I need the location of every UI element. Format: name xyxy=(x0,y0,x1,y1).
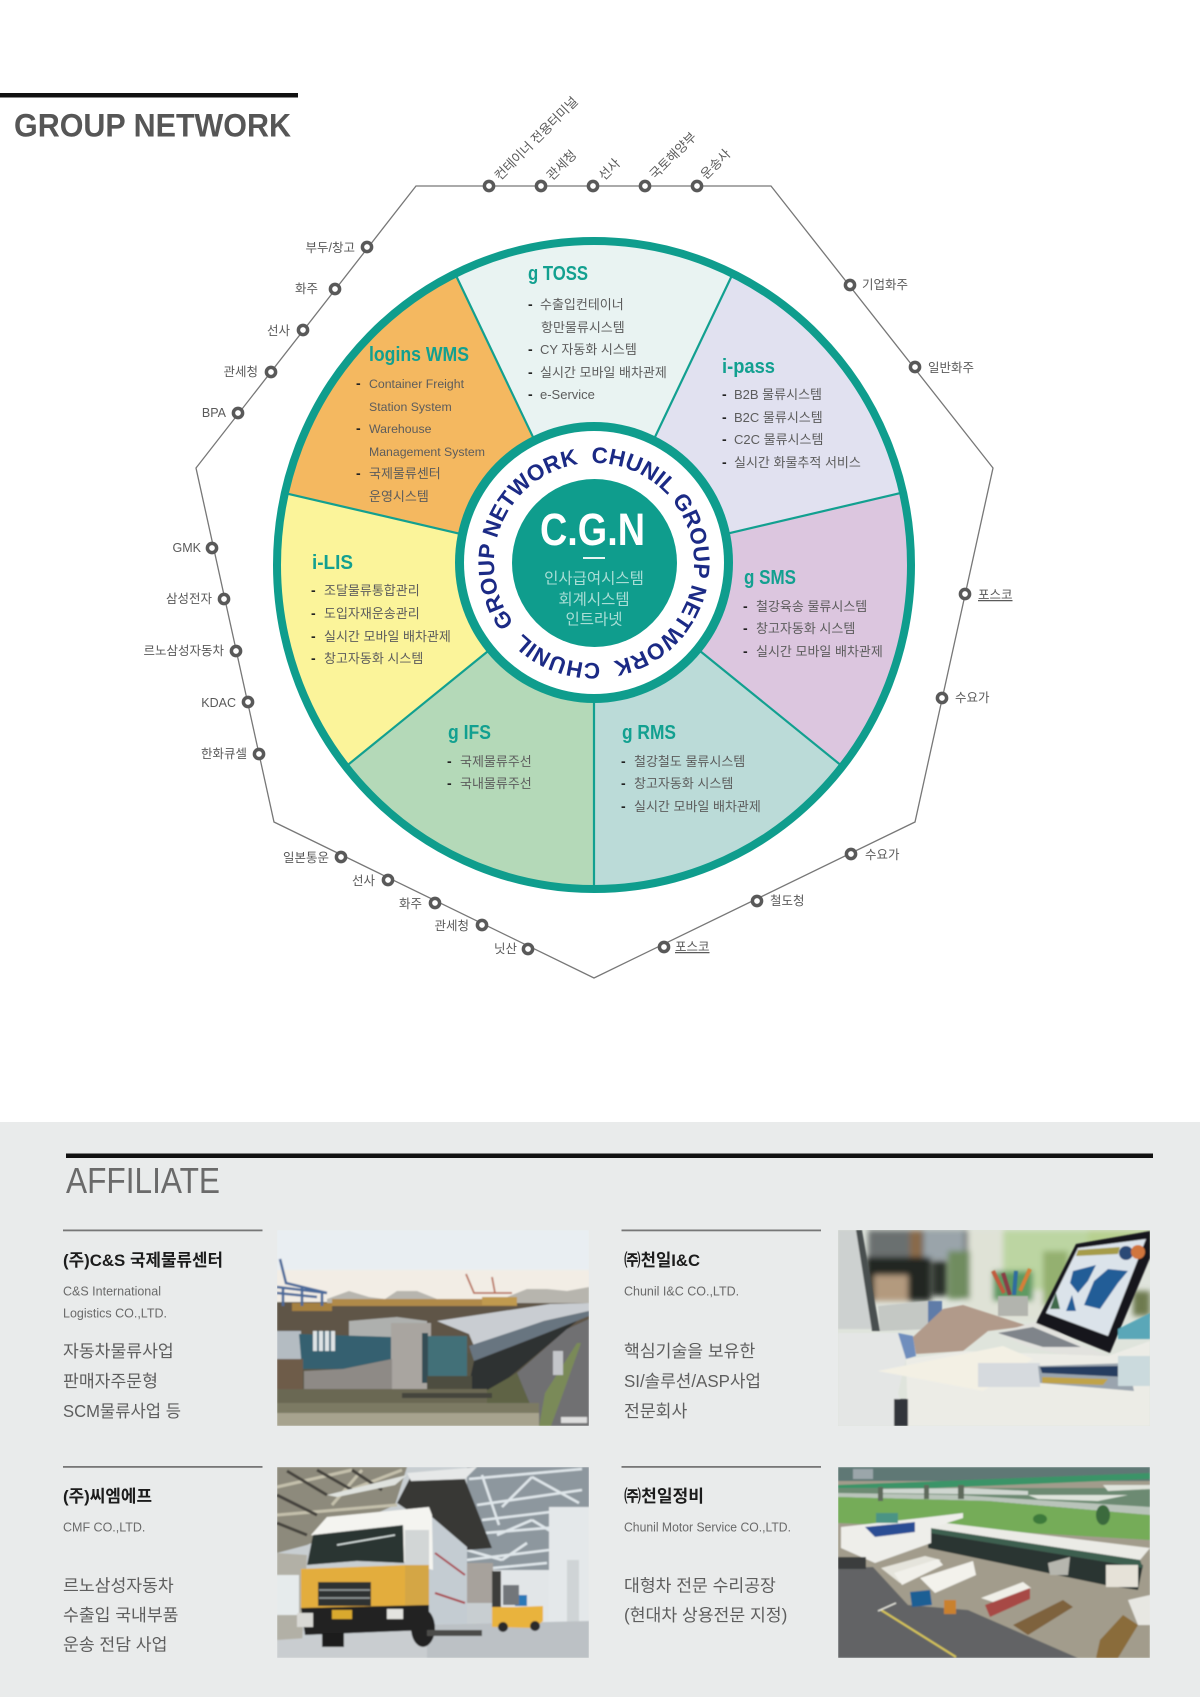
affiliate: Chunil I&C: 전문회사 xyxy=(624,1401,687,1421)
nodes: lower left edge: 관세청 xyxy=(434,919,469,933)
heading: affiliate xyxy=(66,1154,1153,1201)
nodes: upper left edge: 관세청 xyxy=(223,365,258,379)
segment: g TOSS: - xyxy=(528,364,533,380)
affiliate: C&S: 판매자주문형 xyxy=(63,1371,158,1391)
segment: logins WMS: Warehouse xyxy=(369,422,432,436)
nodes: upper left edge: 부두/창고 xyxy=(306,241,355,255)
nodes: lower right edge: 수요가 xyxy=(865,848,900,862)
segment: i-pass: - xyxy=(722,431,727,447)
nodes: left edge: 삼성전자 xyxy=(166,592,212,606)
segment: g TOSS: 실시간 모바일 배차관제 xyxy=(540,365,667,380)
segment: g RMS xyxy=(621,722,761,814)
segment: logins WMS: - xyxy=(356,420,361,436)
nodes: left edge: GMK xyxy=(173,541,202,555)
segment: i-pass: C2C 물류시스템 xyxy=(734,432,823,447)
segment: logins WMS: 국제물류센터 xyxy=(369,466,441,481)
segment: i-LIS: - xyxy=(311,650,316,666)
segment: g TOSS xyxy=(528,263,667,402)
affiliate: CMF xyxy=(63,1466,262,1654)
heading: group network xyxy=(0,93,298,144)
nodes: upper left edge: 선사 xyxy=(267,324,290,338)
segment: i-pass: B2C 물류시스템 xyxy=(734,410,823,425)
nodes: lower right edge: 철도청 xyxy=(770,894,805,908)
segment: i-pass: B2B 물류시스템 xyxy=(734,387,822,402)
photo: truck and forklift xyxy=(277,1467,589,1658)
affiliate: CMF: 수출입 국내부품 xyxy=(63,1605,178,1625)
affiliate: Chunil Motor Service: 대형차 전문 수리공장 xyxy=(624,1576,776,1596)
segment: g IFS: - xyxy=(447,753,452,769)
segment: i-pass: - xyxy=(722,386,727,402)
nodes: upper left edge xyxy=(202,241,372,420)
segment: g TOSS: 수출입컨테이너 xyxy=(540,297,624,312)
segment: g RMS: g RMS xyxy=(622,722,676,744)
segment: g SMS xyxy=(743,567,883,659)
segment: g SMS: 창고자동화 시스템 xyxy=(756,621,855,636)
nodes: right edge: 포스코 xyxy=(978,588,1013,602)
segment: g RMS: - xyxy=(621,753,626,769)
photo: repair yard xyxy=(838,1467,1150,1658)
segment: i-LIS: - xyxy=(311,582,316,598)
segment: g SMS: - xyxy=(743,643,748,659)
nodes: left edge: 한화큐셀 xyxy=(201,747,247,761)
affiliate: Chunil I&C: SI/솔루션/ASP사업 xyxy=(624,1371,761,1391)
center hub: C.G.N: 회계시스템 xyxy=(558,590,630,608)
center hub: C.G.N xyxy=(455,422,733,703)
segment: logins WMS: logins WMS xyxy=(369,344,469,366)
network outline with partner nodes xyxy=(143,94,1013,978)
segment: logins WMS: Container Freight xyxy=(369,377,465,391)
segment: g TOSS: - xyxy=(528,386,533,402)
segment: i-LIS: - xyxy=(311,605,316,621)
affiliate: C&S: SCM물류사업 등 xyxy=(63,1401,181,1421)
nodes: upper left edge: BPA xyxy=(202,406,227,420)
segment: logins WMS: 운영시스템 xyxy=(369,489,429,504)
heading: group network: GROUP NETWORK xyxy=(14,108,291,144)
nodes: top edge: 컨테이너 전용터미널 xyxy=(492,94,581,183)
segment: g RMS: 창고자동화 시스템 xyxy=(634,776,733,791)
segment: g IFS: - xyxy=(447,775,452,791)
nodes: lower left edge: 일본통운 xyxy=(283,851,329,865)
nodes: lower right edge: 포스코 xyxy=(675,940,710,954)
affiliate: CMF: 르노삼성자동차 xyxy=(63,1576,174,1596)
segment: g SMS: - xyxy=(743,598,748,614)
segment: i-LIS: 실시간 모바일 배차관제 xyxy=(324,629,451,644)
heading: affiliate: AFFILIATE xyxy=(66,1160,220,1201)
affiliate: Chunil I&C xyxy=(622,1230,821,1421)
segment: g TOSS: - xyxy=(528,296,533,312)
segment: g SMS: 실시간 모바일 배차관제 xyxy=(756,644,883,659)
affiliate: Chunil Motor Service: (현대차 상용전문 지정) xyxy=(624,1605,787,1625)
segment: i-pass xyxy=(722,356,861,470)
segment: g SMS: 철강육송 물류시스템 xyxy=(756,599,867,614)
segment: logins WMS: - xyxy=(356,375,361,391)
nodes: right edge: 수요가 xyxy=(955,691,990,705)
nodes: top edge: 선사 xyxy=(596,156,623,183)
affiliate: Chunil I&C: 핵심기술을 보유한 xyxy=(624,1341,755,1361)
segment: g SMS: g SMS xyxy=(744,567,796,589)
segment: logins WMS: - xyxy=(356,465,361,481)
segment: g IFS: g IFS xyxy=(448,722,491,744)
wheel diagram xyxy=(273,237,915,893)
nodes: left edge: KDAC xyxy=(201,696,236,710)
nodes: upper left edge: 화주 xyxy=(295,282,318,296)
nodes: lower left edge: 닛산 xyxy=(494,942,517,956)
nodes: lower left edge: 선사 xyxy=(352,874,375,888)
segment: g TOSS: - xyxy=(528,341,533,357)
segment: i-LIS: 도입자재운송관리 xyxy=(324,606,420,621)
nodes: right edge xyxy=(937,588,1013,705)
segment: i-pass: - xyxy=(722,409,727,425)
segment: i-LIS: 조달물류통합관리 xyxy=(324,583,420,598)
segment: i-LIS xyxy=(311,552,451,666)
affiliate: CMF: CMF CO.,LTD. xyxy=(63,1520,145,1534)
affiliate: Chunil Motor Service: Chunil Motor Service CO.,LTD. xyxy=(624,1520,791,1534)
segment: i-pass: i-pass xyxy=(722,356,775,378)
segment: g TOSS: g TOSS xyxy=(528,263,588,285)
segment: i-pass: - xyxy=(722,454,727,470)
nodes: left edge: 르노삼성자동차 xyxy=(143,644,224,658)
segment: g TOSS: 항만물류시스템 xyxy=(541,320,625,335)
segment: i-LIS: i-LIS xyxy=(312,552,353,574)
affiliate: C&S xyxy=(63,1230,262,1421)
panel: affiliate xyxy=(0,1122,1200,1697)
segment: g IFS: 국내물류주선 xyxy=(460,776,532,791)
affiliate: Chunil Motor Service xyxy=(622,1466,821,1625)
affiliate: C&S: 자동차물류사업 xyxy=(63,1341,174,1361)
segment: logins WMS: Station System xyxy=(369,400,452,414)
photo: laptop xyxy=(838,1230,1150,1426)
nodes: upper right edge: 기업화주 xyxy=(862,278,908,292)
nodes: lower left edge xyxy=(283,851,533,956)
nodes: top edge: 운송사 xyxy=(698,146,734,182)
center hub: C.G.N: 인사급여시스템 xyxy=(544,570,644,588)
wheel segments xyxy=(281,245,907,885)
nodes: top edge: 관세청 xyxy=(544,147,579,183)
affiliate: C&S: (주)C&S 국제물류센터 xyxy=(63,1251,223,1270)
segment: g RMS: - xyxy=(621,775,626,791)
segment: i-LIS: - xyxy=(311,628,316,644)
segment: g TOSS: CY 자동화 시스템 xyxy=(540,342,637,357)
photo: logistics center xyxy=(277,1258,589,1426)
segment: i-LIS: 창고자동화 시스템 xyxy=(324,651,423,666)
center hub: C.G.N: 인트라넷 xyxy=(565,610,623,628)
segment: g SMS: - xyxy=(743,620,748,636)
segment: g RMS: 철강철도 물류시스템 xyxy=(634,754,745,769)
ring text: GROUP NETWORK CHUNIL GROUP NETWORK CHUNIL xyxy=(478,447,710,679)
segment: i-pass: 실시간 화물추적 서비스 xyxy=(734,455,861,470)
segment: g RMS: 실시간 모바일 배차관제 xyxy=(634,799,761,814)
center hub: C.G.N: C.G.N xyxy=(540,504,645,555)
nodes: upper right edge xyxy=(845,278,974,375)
affiliate: Chunil Motor Service: ㈜천일정비 xyxy=(624,1487,704,1506)
affiliate: C&S: Logistics CO.,LTD. xyxy=(63,1306,167,1320)
segment: g IFS xyxy=(447,722,532,791)
nodes: left edge xyxy=(143,541,264,761)
nodes: top edge: 국토해양부 xyxy=(647,129,699,182)
nodes: top edge xyxy=(484,94,734,191)
nodes: lower right edge xyxy=(659,848,900,954)
segment: g TOSS: e-Service xyxy=(540,387,595,402)
segment: logins WMS xyxy=(356,344,485,504)
affiliate: Chunil I&C: Chunil I&C CO.,LTD. xyxy=(624,1284,739,1298)
segment: g IFS: 국제물류주선 xyxy=(460,754,532,769)
affiliate: CMF: 운송 전담 사업 xyxy=(63,1634,167,1654)
affiliate: Chunil I&C: ㈜천일I&C xyxy=(624,1251,700,1270)
segment: logins WMS: Management System xyxy=(369,445,485,459)
segment: g RMS: - xyxy=(621,798,626,814)
affiliate: C&S: C&S International xyxy=(63,1284,161,1298)
affiliate: CMF: (주)씨엠에프 xyxy=(63,1487,152,1506)
nodes: lower left edge: 화주 xyxy=(399,897,422,911)
nodes: upper right edge: 일반화주 xyxy=(928,361,974,375)
